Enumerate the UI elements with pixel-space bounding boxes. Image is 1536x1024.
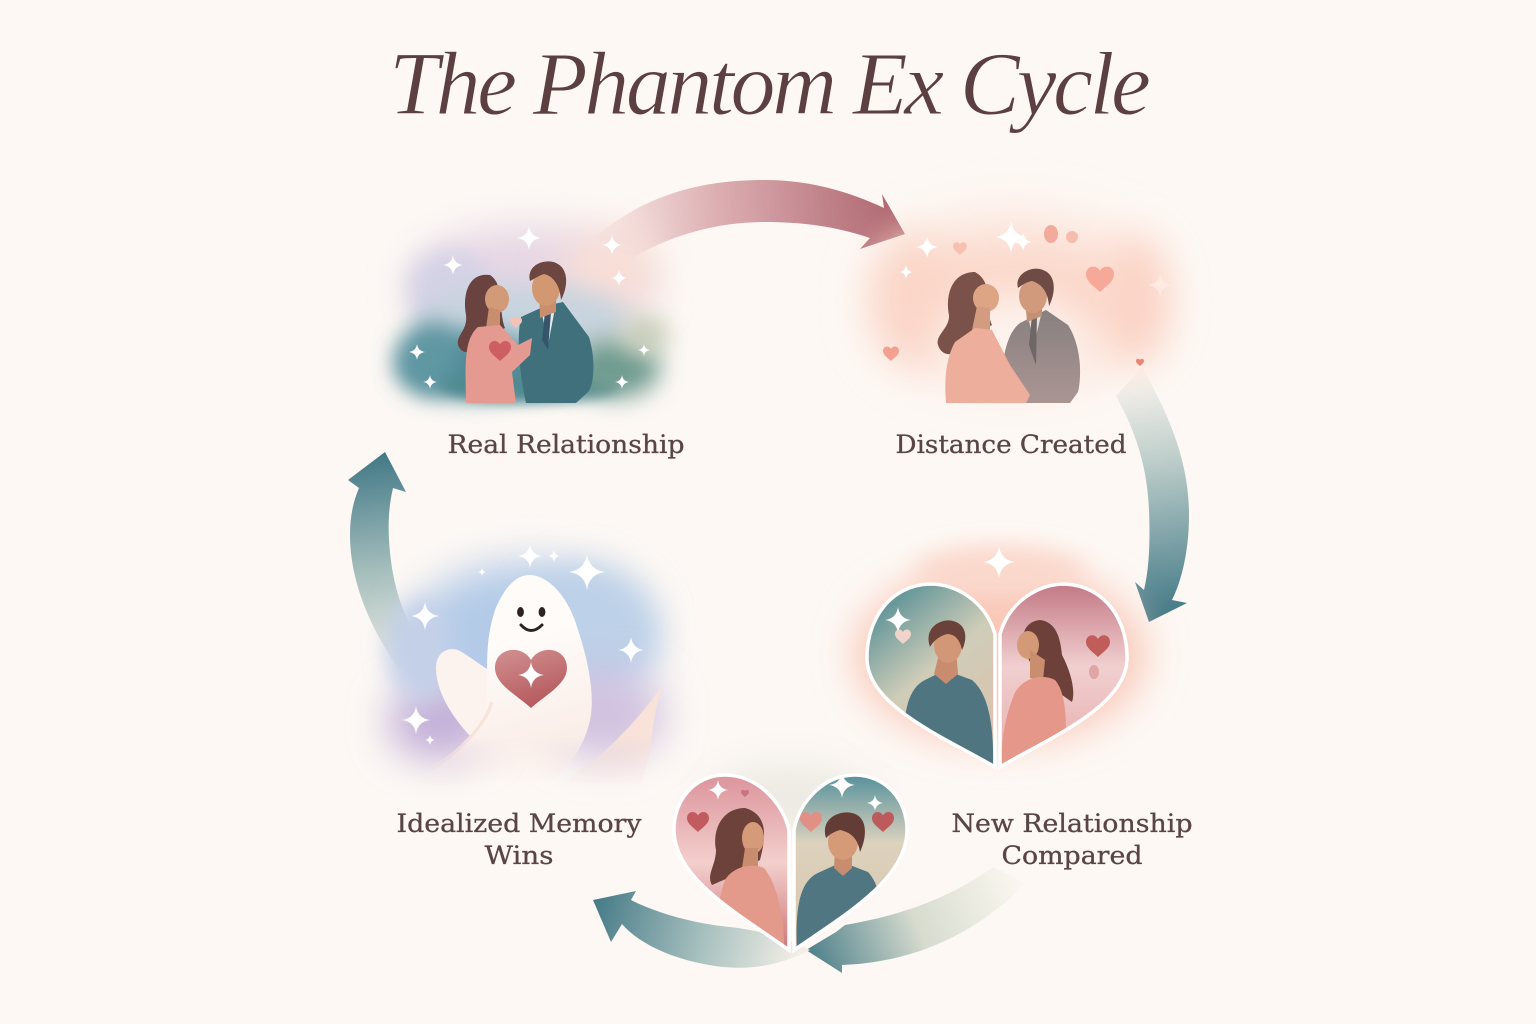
man in teal jacket [519, 261, 593, 403]
ghost body [436, 575, 664, 768]
arrow: real relationship to distance created [594, 180, 905, 258]
arrow: new relationship toward bottom heart [806, 867, 1026, 973]
faded woman in pink top [938, 272, 1030, 403]
heart outline [867, 584, 1127, 767]
heart outline [674, 775, 907, 950]
sparkles [402, 544, 644, 745]
panel: new relationship compared illustration [855, 546, 1145, 770]
icon: sparkle above heart [983, 546, 1015, 578]
panel: distance created illustration [875, 221, 1172, 403]
woman in pink dress [458, 275, 532, 403]
watercolor cloud [398, 227, 669, 403]
split heart left: man in teal [868, 586, 994, 764]
icon: small pale heart between couple [510, 317, 522, 328]
split heart left: woman in pink [676, 776, 788, 946]
peach glow [855, 548, 1145, 743]
label: idealized memory wins [396, 809, 642, 870]
blue and lavender glow [388, 562, 665, 760]
label: new relationship compared: New Relationship [952, 809, 1192, 838]
split heart right: woman in pink [1002, 586, 1125, 764]
floating hearts and sparkles [883, 221, 1172, 366]
label: real relationship: Real Relationship [448, 430, 684, 459]
label: distance created: Distance Created [896, 430, 1126, 459]
ghost face [517, 607, 545, 630]
arrow: bottom heart to idealized memory [593, 891, 810, 968]
arrow: distance created to new relationship [1116, 367, 1189, 622]
panel: comparison heart at bottom [670, 765, 912, 952]
sparkles [409, 226, 650, 389]
label: idealized memory wins: Wins [484, 841, 554, 870]
peach glow [875, 228, 1167, 395]
arrow: idealized memory to real relationship [348, 452, 425, 668]
icon: heart held by ghost [495, 650, 567, 708]
soft halo [705, 765, 875, 835]
icon: large floating heart [1086, 267, 1114, 292]
faded man in grey suit [1002, 269, 1080, 403]
panel: idealized memory ghost illustration [388, 544, 665, 784]
panel: real relationship illustration [398, 226, 669, 403]
icon: heart on chest [489, 341, 511, 361]
label: new relationship compared [952, 809, 1192, 870]
title: The Phantom Ex Cycle [389, 35, 1151, 134]
label: new relationship compared: Compared [1002, 841, 1142, 870]
label: idealized memory wins: Idealized Memory [396, 809, 642, 838]
split heart right: man in teal [796, 776, 906, 946]
